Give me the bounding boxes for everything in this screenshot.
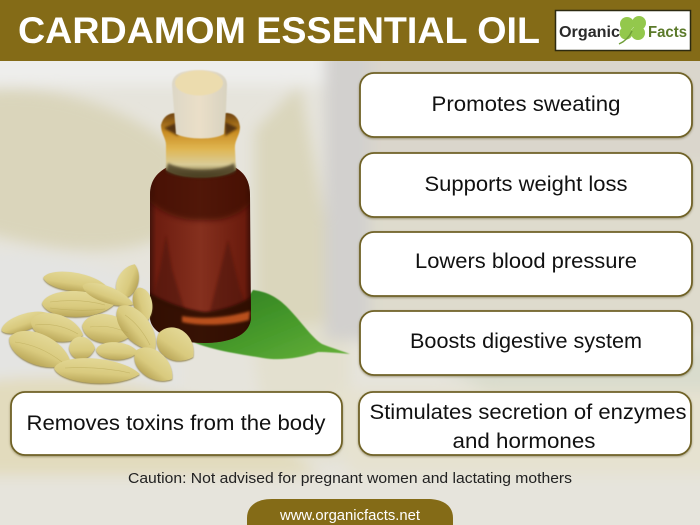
icon: four-leaf clover <box>619 16 646 44</box>
title banner <box>0 0 700 61</box>
benefit: stimulates secretion: and hormones <box>452 430 596 453</box>
cardamom pods pile <box>0 260 202 390</box>
golden neck <box>161 113 240 178</box>
bottle of cardamom oil <box>148 70 253 345</box>
benefit: removes toxins <box>11 392 342 455</box>
caution note: Caution: Not advised for pregnant women and lactating mothers <box>128 471 572 487</box>
logo: Organic Facts <box>556 10 690 50</box>
benefit: promotes sweating: Promotes sweating <box>432 93 620 116</box>
cork stopper <box>172 70 227 138</box>
benefit: lowers blood pressure <box>360 232 692 296</box>
logo: Organic Facts: Organic <box>559 24 620 41</box>
benefit: promotes sweating <box>360 73 692 137</box>
benefit: lowers blood pressure: Lowers blood pressure <box>415 250 637 273</box>
benefit: supports weight loss: Supports weight loss <box>424 173 628 196</box>
benefit: boosts digestive system: Boosts digestive system <box>410 330 642 353</box>
website footer tab <box>247 499 453 525</box>
benefit: boosts digestive system <box>360 311 692 375</box>
title: CARDAMOM ESSENTIAL OIL <box>18 10 540 51</box>
website footer tab: www.organicfacts.net <box>279 508 420 524</box>
leaf under the bottle <box>183 290 350 359</box>
benefit: supports weight loss <box>360 153 692 217</box>
oil body <box>148 160 253 345</box>
dark collar <box>164 122 238 136</box>
logo: Organic Facts: Facts <box>648 24 687 41</box>
benefit: stimulates secretion: Stimulates secretion of enzymes <box>370 401 686 424</box>
benefit: removes toxins: Removes toxins from the body <box>26 412 326 435</box>
benefit: stimulates secretion <box>359 392 691 455</box>
